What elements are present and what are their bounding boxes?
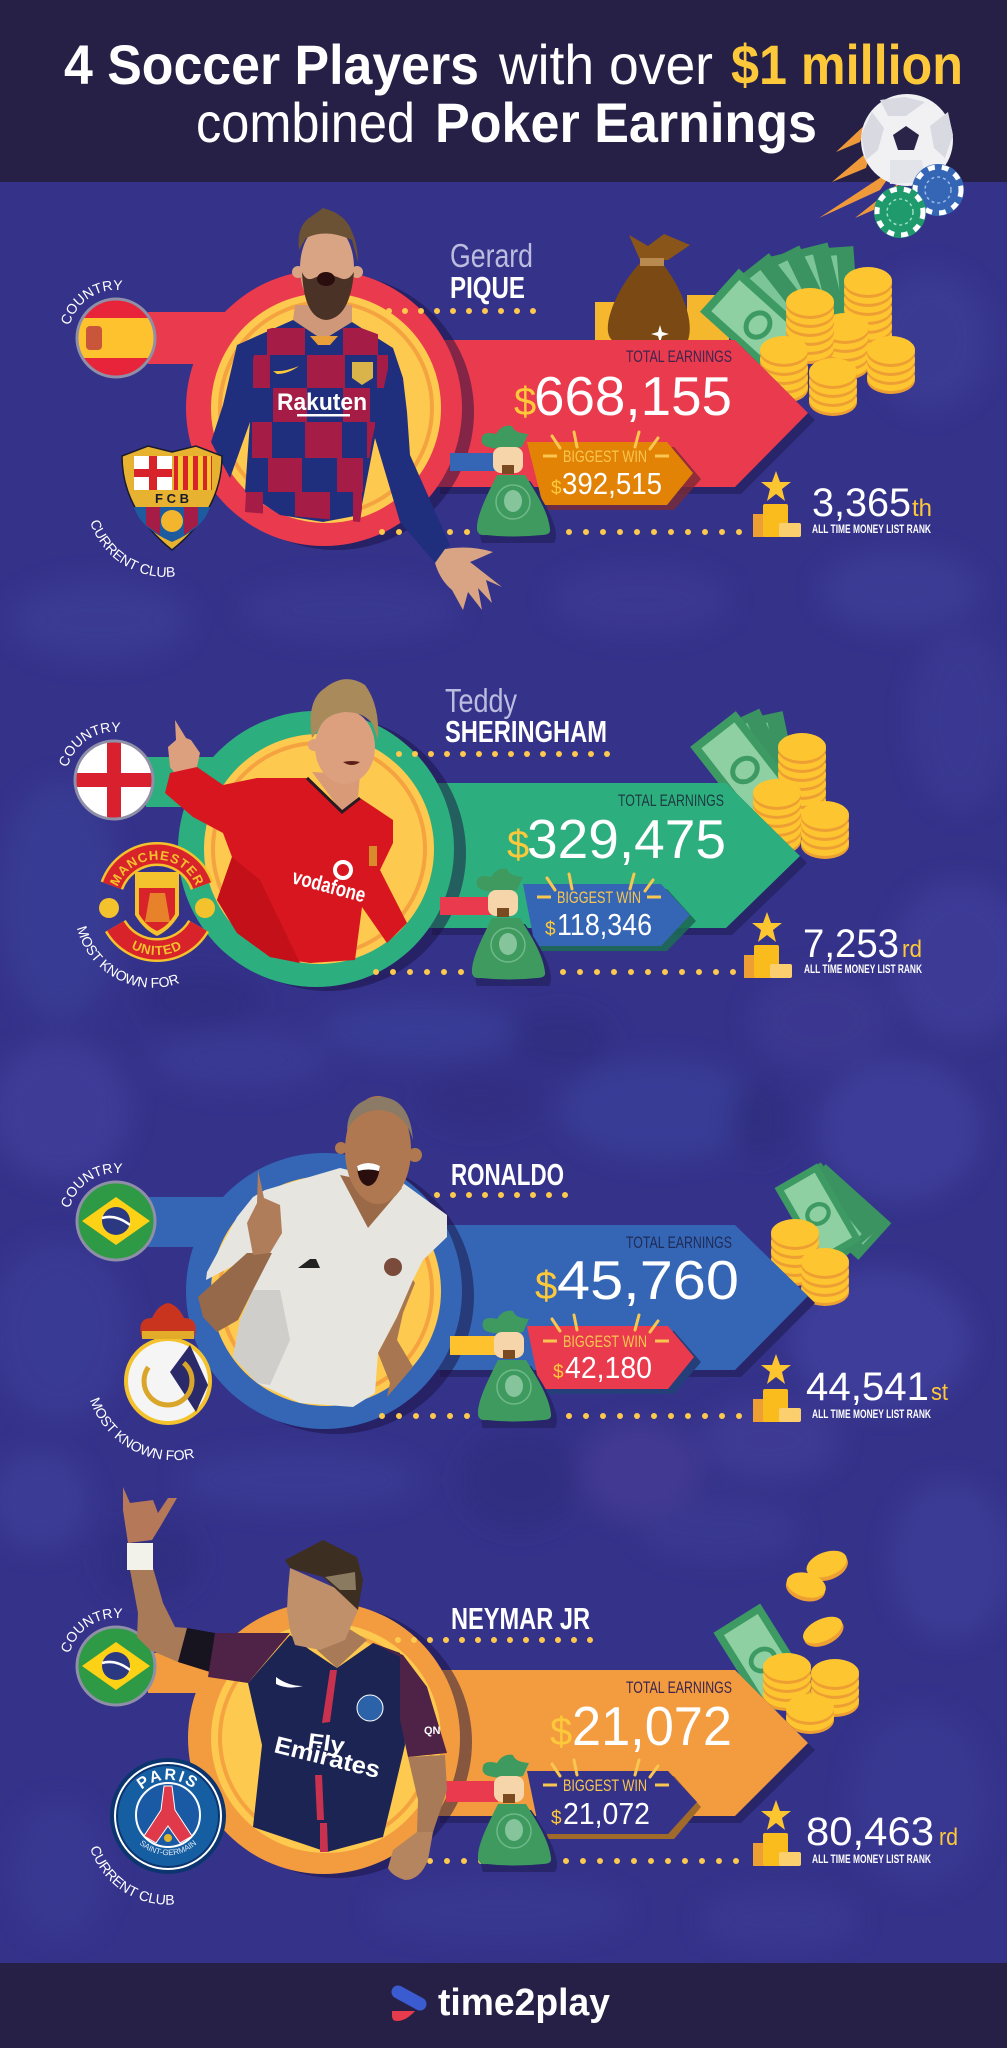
biggest win tag: 392,515 (562, 466, 662, 501)
name: Teddy (445, 682, 517, 719)
total earnings: TOTAL EARNINGS (618, 791, 724, 810)
icon: money bag, cash and coins (595, 234, 915, 416)
rank: th (912, 495, 932, 522)
label: country: COUNTRY (62, 1608, 122, 1652)
biggest win tag: BIGGEST WIN (563, 1332, 647, 1351)
flag: England (74, 740, 154, 820)
photo: Neymar Jr: QN (424, 1725, 441, 1737)
flag: Brazil (76, 1181, 156, 1261)
icon: cash and coins (690, 709, 849, 859)
total earnings: $ (535, 1264, 557, 1308)
photo: Teddy Sheringham (165, 679, 407, 963)
header band (0, 0, 1007, 182)
biggest win tag: $ (545, 919, 556, 940)
icon: hand holding bag (440, 869, 551, 986)
biggest win tag (527, 432, 701, 510)
label: current club: CURRENT CLUB (91, 520, 175, 577)
name: Gerard (450, 237, 533, 274)
rank (753, 471, 932, 537)
rank: 80,463 (806, 1810, 934, 1854)
total earnings: 668,155 (534, 365, 732, 427)
rank: ALL TIME MONEY LIST RANK (812, 1407, 931, 1421)
label: current club: CURRENT CLUB (91, 1846, 174, 1905)
rank (753, 1354, 948, 1422)
photo: Gerard Pique: Rakuten (277, 389, 367, 416)
total earnings (535, 1233, 739, 1311)
rank: st (931, 1379, 948, 1406)
total earnings: TOTAL EARNINGS (626, 347, 732, 366)
total earnings: 45,760 (557, 1249, 739, 1311)
total earnings: $ (514, 380, 536, 424)
panel: Neymar Jr (62, 1487, 958, 1905)
crest: Manchester United (99, 842, 215, 962)
biggest win tag: BIGGEST WIN (563, 447, 647, 466)
photo: Neymar Jr: Emirates (272, 1732, 383, 1784)
photo: Ronaldo (198, 1096, 447, 1407)
name: NEYMAR JR (451, 1601, 590, 1636)
crest: Paris Saint-Germain: PARIS (136, 1768, 197, 1789)
crest: FC Barcelona: F C B (155, 491, 189, 506)
rank: 44,541 (806, 1365, 929, 1409)
panel: Teddy Sheringham (60, 679, 922, 991)
label: most known for: MOST KNOWN FOR (77, 926, 180, 988)
total earnings: 329,475 (527, 808, 726, 870)
crest: FC Barcelona (122, 446, 222, 550)
connector bar to flag (148, 1653, 238, 1693)
player ring (186, 270, 474, 550)
icon: cash and coins (771, 1162, 891, 1306)
name (450, 237, 533, 305)
label: country: COUNTRY (60, 722, 120, 766)
rank: ALL TIME MONEY LIST RANK (812, 1852, 931, 1866)
title: with over (498, 33, 713, 96)
biggest win tag: 42,180 (565, 1350, 652, 1385)
earnings arrow (430, 1670, 815, 1823)
connector bar to flag (148, 312, 238, 364)
biggest win tag (527, 1760, 701, 1839)
biggest win tag: 118,346 (557, 907, 652, 942)
label: country: COUNTRY (62, 280, 122, 324)
biggest win tag: BIGGEST WIN (557, 888, 641, 907)
icon: hand holding bag (446, 1755, 557, 1872)
crest: Paris Saint-Germain (110, 1758, 226, 1874)
player ring (178, 711, 466, 991)
rank (744, 912, 922, 978)
crest: Manchester United: MANCHESTER (110, 850, 203, 886)
title: Poker Earnings (435, 91, 817, 154)
panel: Gerard Pique (62, 208, 932, 610)
rank: rd (902, 936, 922, 963)
crest: Real Madrid (124, 1303, 212, 1425)
photo: Neymar Jr (123, 1487, 447, 1880)
biggest win tag: $ (551, 478, 562, 499)
player ring (186, 1153, 474, 1434)
biggest win tag: BIGGEST WIN (563, 1776, 647, 1795)
icon: football and poker chips (819, 94, 964, 238)
connector bar to flag (148, 1197, 238, 1247)
icon: hand holding bag (450, 1311, 557, 1428)
connector bar to flag (146, 757, 230, 807)
total earnings (550, 1678, 732, 1757)
title: combined (196, 91, 415, 154)
total earnings: TOTAL EARNINGS (626, 1678, 732, 1697)
label: most known for: MOST KNOWN FOR (90, 1397, 194, 1460)
biggest win tag: 21,072 (563, 1796, 650, 1831)
photo: Gerard Pique (211, 208, 502, 610)
rank: 7,253 (803, 922, 899, 966)
panel: Ronaldo (62, 1096, 948, 1460)
biggest win tag: $ (553, 1362, 564, 1383)
rank: 3,365 (812, 481, 911, 525)
title (64, 33, 963, 154)
icon: cash and coins (713, 1546, 859, 1734)
earnings arrow (430, 1225, 815, 1377)
biggest win tag (527, 1315, 701, 1394)
total earnings: $ (507, 823, 529, 867)
biggest win tag: $ (551, 1808, 562, 1829)
rank (753, 1800, 958, 1866)
name: PIQUE (450, 270, 525, 305)
crest: Paris Saint-Germain: SAINT-GERMAIN (140, 1840, 196, 1856)
crest: Manchester United: UNITED (132, 940, 180, 955)
rank: rd (939, 1824, 958, 1851)
title: $1 million (731, 33, 963, 96)
flag: Spain (76, 298, 156, 378)
earnings arrow (430, 340, 815, 494)
total earnings: TOTAL EARNINGS (626, 1233, 732, 1252)
earnings arrow (422, 783, 807, 935)
footer band (0, 1963, 1007, 2048)
label: country: COUNTRY (62, 1163, 122, 1207)
total earnings: 21,072 (572, 1695, 732, 1757)
rank: ALL TIME MONEY LIST RANK (804, 962, 922, 976)
biggest win tag (523, 874, 696, 951)
icon: hand holding bag (450, 426, 556, 543)
name: SHERINGHAM (445, 714, 607, 749)
rank: ALL TIME MONEY LIST RANK (812, 522, 931, 536)
player ring (188, 1602, 472, 1878)
flag: Brazil (76, 1626, 156, 1706)
photo: Teddy Sheringham: vodafone (290, 866, 368, 907)
logo: time2play: time2play (438, 1982, 610, 2024)
name (445, 682, 607, 749)
name: RONALDO (451, 1157, 564, 1192)
title: 4 Soccer Players (64, 33, 479, 96)
photo: Neymar Jr: Fly (306, 1728, 347, 1758)
total earnings: $ (550, 1710, 572, 1754)
